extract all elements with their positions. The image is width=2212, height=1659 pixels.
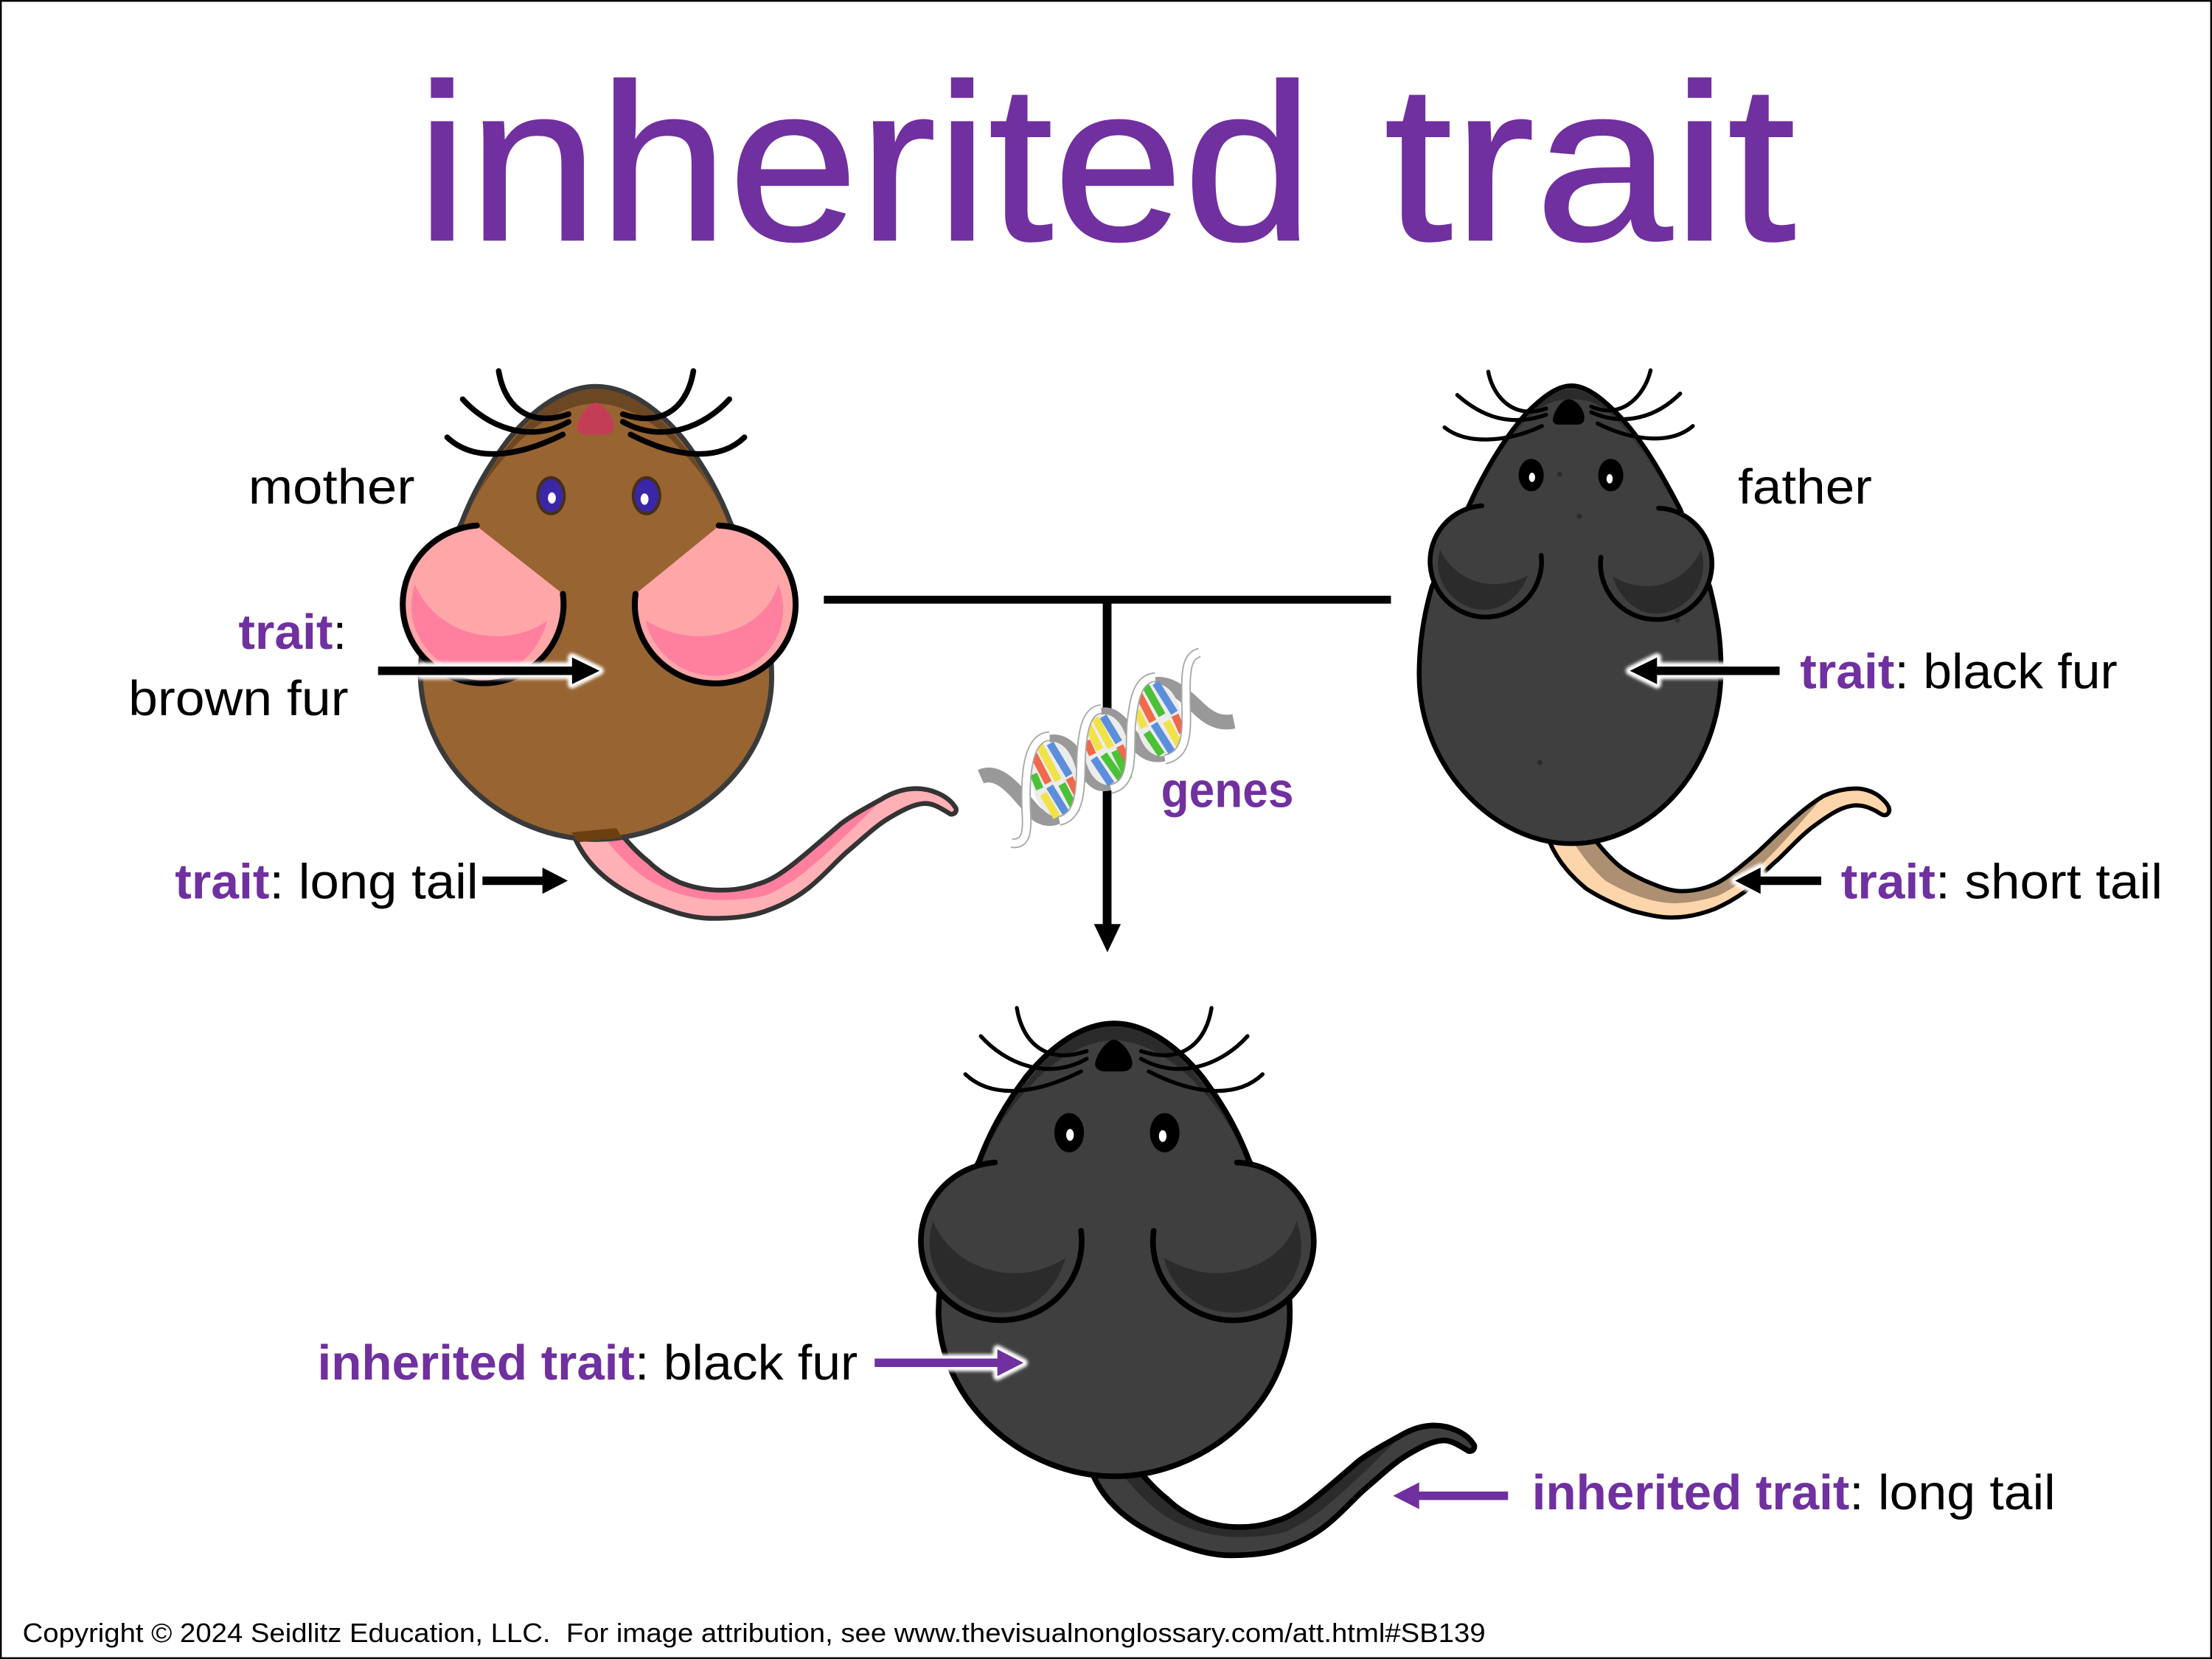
father left ear [1430, 506, 1542, 617]
father nose [1553, 399, 1585, 425]
father head shading [1478, 389, 1670, 499]
offspring left ear [921, 1163, 1082, 1321]
mother whiskers [448, 371, 745, 454]
label: inherited trait black fur [317, 1335, 858, 1391]
label: mother trait long tail [175, 855, 479, 910]
arrow: to black fur [1630, 658, 1780, 684]
label: mother trait brown fur: : [333, 605, 347, 660]
mouse: offspring (black) [921, 1008, 1475, 1555]
father fur spots [1537, 472, 1680, 765]
offspring eyes [1054, 1113, 1180, 1152]
offspring tail [1091, 1425, 1475, 1555]
arrow: to long tail [482, 868, 568, 894]
arrow: to brown fur [378, 658, 599, 684]
label: father trait short tail: : short tail [1935, 855, 2163, 910]
offspring body [939, 1023, 1290, 1476]
father body [1419, 386, 1721, 844]
label: father trait short tail: trait [1841, 855, 1935, 910]
mother eyes [536, 476, 661, 515]
offspring head shading [985, 1026, 1243, 1153]
title: trait [1384, 38, 1797, 288]
label: father: father [1738, 459, 1872, 515]
father whiskers [1444, 370, 1693, 439]
mouse: father (black) [1419, 370, 1889, 917]
arrow: purple to black fur [874, 1349, 1023, 1376]
label: father trait black fur: trait [1800, 644, 1895, 700]
label: father trait black fur [1800, 644, 2118, 700]
label: inherited trait long tail [1532, 1465, 2056, 1520]
label: mother trait long tail: : long tail [269, 855, 479, 910]
mother tail overlap [571, 828, 622, 842]
father right ear [1601, 508, 1712, 619]
offspring right ear [1153, 1163, 1314, 1321]
label: mother trait brown fur: brown fur [128, 671, 349, 726]
title: inherited [416, 38, 1313, 288]
offspring whiskers [965, 1008, 1262, 1091]
label: father trait black fur: : black fur [1895, 644, 2118, 700]
icon: DNA helix [981, 653, 1234, 844]
mouse: mother (brown) [403, 371, 956, 919]
label: father trait short tail [1841, 855, 2163, 910]
label: mother: mother [248, 459, 414, 515]
mother head shading [467, 389, 725, 516]
label: inherited trait black fur: inherited trait [317, 1335, 635, 1391]
label: inherited trait long tail: : long tail [1849, 1465, 2056, 1520]
label: mother trait brown fur: trait [238, 605, 333, 660]
mother tail [573, 789, 956, 919]
arrow: to short tail [1735, 868, 1821, 894]
connector lines between parents and offspring [824, 596, 1391, 952]
label: inherited trait long tail: inherited trait [1532, 1465, 1849, 1520]
label: mother trait brown fur [128, 605, 349, 726]
title [416, 38, 1797, 288]
mother right ear [635, 526, 796, 684]
offspring nose [1095, 1040, 1133, 1071]
mother nose [577, 403, 614, 434]
mother left ear [403, 526, 563, 684]
mother body [420, 386, 772, 839]
label: mother trait long tail: trait [175, 855, 269, 910]
copyright footer: Copyright © 2024 Seidlitz Education, LLC. For image attribution, see www.thevisualnonglossary.com/att.html#SB139 [23, 1618, 1486, 1648]
arrow: purple to long tail [1393, 1482, 1508, 1509]
label: genes: genes [1161, 762, 1293, 818]
label: inherited trait black fur: : black fur [635, 1335, 858, 1391]
father eyes [1519, 459, 1624, 491]
father tail [1550, 788, 1889, 917]
